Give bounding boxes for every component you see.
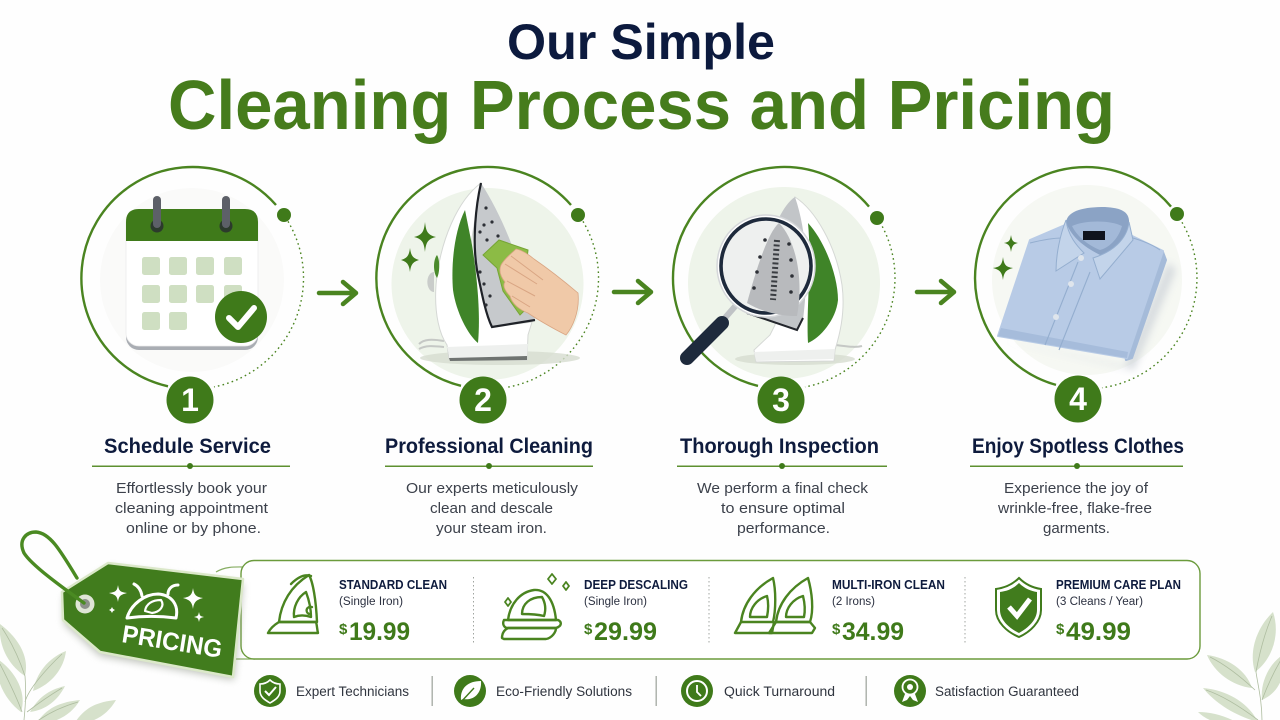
step 4: enjoy spotless clothes bbox=[970, 167, 1197, 537]
icon: iron being wiped with cloth bbox=[401, 183, 580, 365]
ring and number 3 bbox=[673, 167, 895, 424]
tag label: PRICING bbox=[120, 620, 224, 664]
plan: deep descaling bbox=[502, 574, 688, 646]
benefit: satisfaction guaranteed: Satisfaction Guaranteed bbox=[935, 684, 1079, 699]
description: cleaning appointment bbox=[115, 501, 268, 517]
ring and number 1: 1 bbox=[181, 382, 199, 418]
title: Cleaning Process and Pricing bbox=[168, 66, 1115, 144]
step 1: schedule service bbox=[81, 167, 304, 537]
heading: Schedule Service bbox=[104, 435, 271, 458]
description: We perform a final check bbox=[697, 481, 869, 497]
description: Our experts meticulously bbox=[406, 481, 579, 497]
step 3: thorough inspection bbox=[673, 167, 895, 537]
plan: deep descaling: 29.99 bbox=[594, 618, 657, 646]
benefit: quick turnaround bbox=[681, 675, 835, 707]
panel: pricing bbox=[216, 560, 1200, 659]
icon: folded blue shirt bbox=[993, 207, 1176, 370]
description: garments. bbox=[1043, 521, 1110, 537]
plan: premium care plan: 49.99 bbox=[1066, 618, 1131, 646]
plan: standard clean: STANDARD CLEAN bbox=[339, 578, 447, 592]
plan: premium care plan: PREMIUM CARE PLAN bbox=[1056, 578, 1181, 592]
arrow 1 bbox=[319, 282, 356, 304]
icon: iron outline bbox=[268, 575, 318, 633]
description: wrinkle-free, flake-free bbox=[997, 501, 1152, 517]
plan: premium care plan: $ bbox=[1056, 621, 1065, 638]
description bbox=[997, 481, 1152, 537]
description bbox=[697, 481, 869, 537]
description: clean and descale bbox=[430, 501, 553, 517]
icon: iron under magnifying glass bbox=[687, 197, 862, 365]
tag icon bbox=[109, 585, 204, 622]
divider bbox=[385, 463, 593, 469]
plan: premium care plan: (3 Cleans / Year) bbox=[1056, 596, 1143, 608]
decorative leaves: bottom left bbox=[0, 624, 116, 720]
icon: two irons bbox=[735, 578, 815, 633]
arrow 2 bbox=[614, 281, 651, 303]
description: online or by phone. bbox=[126, 521, 261, 537]
icon: calendar bbox=[126, 196, 267, 350]
divider bbox=[970, 463, 1183, 469]
description: to ensure optimal bbox=[721, 501, 845, 517]
plan: multi-iron clean bbox=[735, 578, 945, 646]
description: performance. bbox=[737, 521, 830, 537]
plan: standard clean: 19.99 bbox=[349, 618, 410, 646]
plan: multi-iron clean: $ bbox=[832, 621, 841, 638]
icon: iron with sparkles bbox=[502, 574, 569, 639]
ring and number 2 bbox=[376, 167, 599, 424]
description: Effortlessly book your bbox=[116, 481, 267, 497]
benefit: eco-friendly solutions: Eco-Friendly Solutions bbox=[496, 684, 632, 699]
icon: shield with check bbox=[996, 578, 1041, 637]
heading: Professional Cleaning bbox=[385, 435, 593, 458]
plan: deep descaling: $ bbox=[584, 621, 593, 638]
divider bbox=[92, 463, 290, 469]
benefit: satisfaction guaranteed bbox=[894, 675, 1079, 707]
plan: standard clean: $ bbox=[339, 621, 348, 638]
pricing tag bbox=[22, 532, 243, 680]
plan: multi-iron clean: (2 Irons) bbox=[832, 596, 875, 608]
description: Experience the joy of bbox=[1004, 481, 1149, 497]
benefit: expert technicians bbox=[254, 675, 409, 707]
plan: multi-iron clean: 34.99 bbox=[842, 618, 904, 646]
heading: Thorough Inspection bbox=[680, 435, 879, 458]
benefits row bbox=[254, 675, 1079, 707]
plan: deep descaling: DEEP DESCALING bbox=[584, 578, 688, 592]
plan: standard clean bbox=[268, 575, 447, 646]
title bbox=[168, 14, 1115, 144]
arrow 3 bbox=[917, 281, 954, 303]
heading: Enjoy Spotless Clothes bbox=[972, 435, 1184, 458]
ring and number 1 bbox=[81, 167, 304, 423]
step 2: professional cleaning bbox=[376, 167, 599, 537]
description bbox=[115, 481, 268, 537]
description bbox=[406, 481, 579, 537]
plan: multi-iron clean: MULTI-IRON CLEAN bbox=[832, 578, 945, 592]
ring and number 4 bbox=[975, 167, 1197, 422]
ring and number 3: 3 bbox=[772, 382, 790, 418]
plan: standard clean: (Single Iron) bbox=[339, 596, 403, 608]
benefit: quick turnaround: Quick Turnaround bbox=[724, 684, 835, 699]
ring and number 2: 2 bbox=[474, 382, 492, 418]
tag string bbox=[22, 532, 84, 603]
description: your steam iron. bbox=[436, 521, 547, 537]
benefit: eco-friendly solutions bbox=[454, 675, 632, 707]
title: Our Simple bbox=[507, 14, 775, 70]
benefit: expert technicians: Expert Technicians bbox=[296, 684, 409, 699]
plan: deep descaling: (Single Iron) bbox=[584, 596, 647, 608]
divider bbox=[677, 463, 887, 469]
plan: premium care plan bbox=[996, 578, 1181, 646]
ring and number 4: 4 bbox=[1069, 381, 1087, 417]
decorative leaves: bottom right bbox=[1198, 612, 1280, 720]
